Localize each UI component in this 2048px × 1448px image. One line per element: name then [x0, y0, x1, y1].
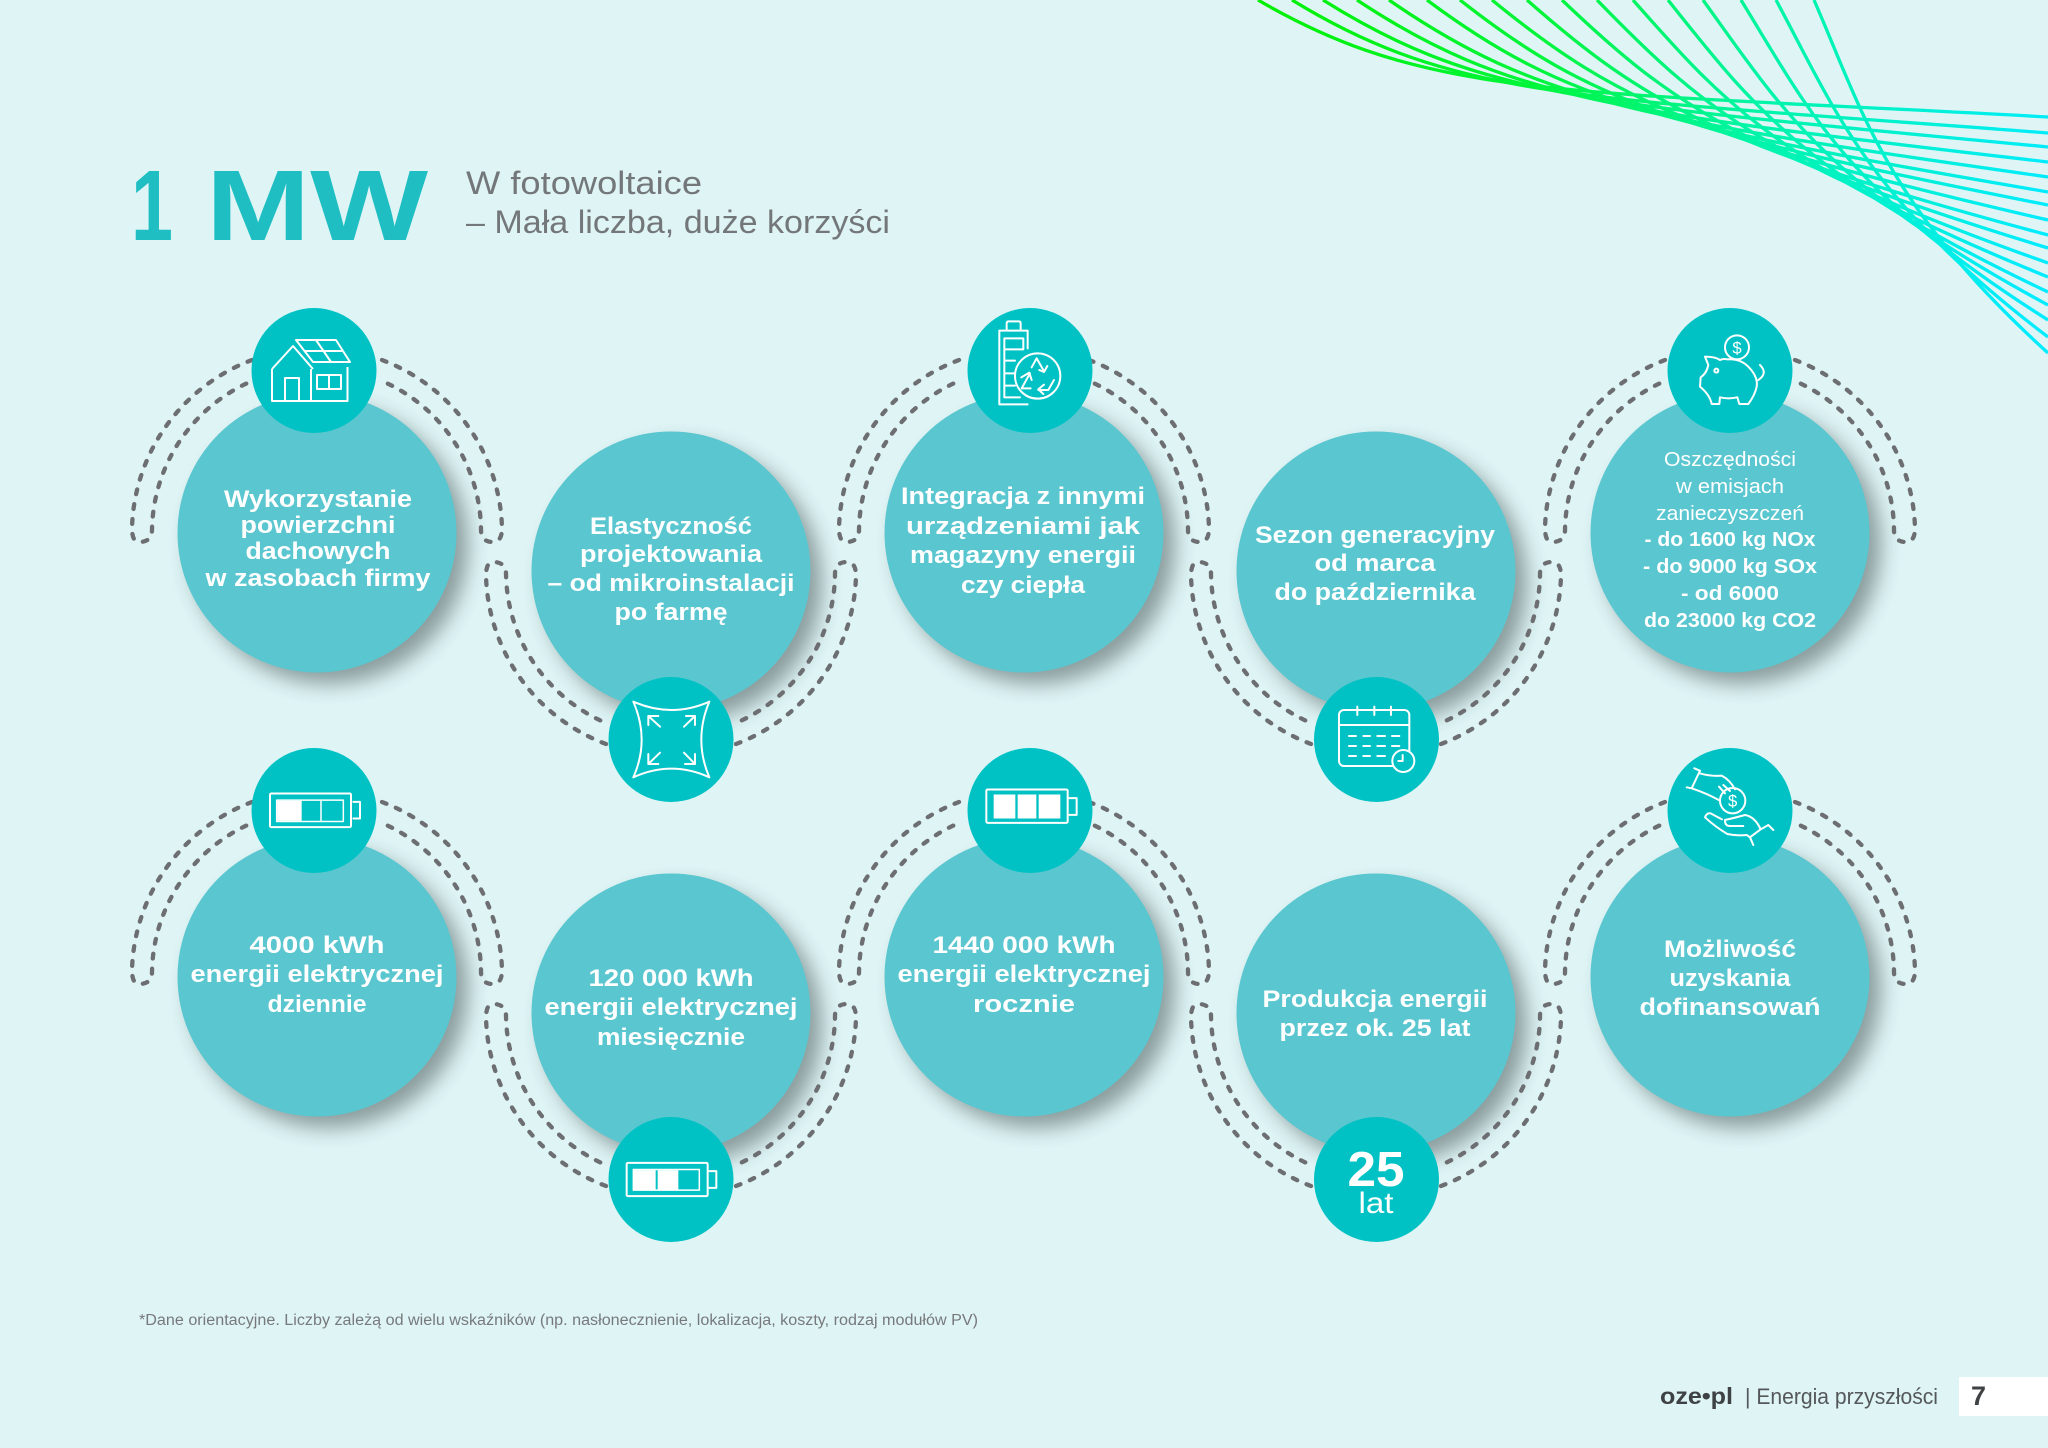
- panel: 4000 kWh: [132, 748, 502, 1128]
- icon: battery one third: [270, 794, 360, 827]
- panel: 1440 000 kWh: 1440 000 kWh: [932, 932, 1116, 959]
- page number: 7: [1971, 1381, 1986, 1411]
- panel: 25 lat: Produkcja energii: [1262, 986, 1488, 1013]
- panel: 1440 000 kWh: rocznie: [973, 991, 1075, 1018]
- panel: sezon: Sezon generacyjny: [1255, 522, 1495, 549]
- panel: 120 000 kWh: miesięcznie: [597, 1024, 745, 1051]
- panel: integracja: Integracja z innymi: [901, 483, 1145, 510]
- footer brand: oze•pl: [1660, 1383, 1733, 1409]
- panel: dachy: Wykorzystanie: [224, 486, 412, 513]
- subtitle: W fotowoltaice: [466, 165, 702, 201]
- panel: 1440 000 kWh: [839, 748, 1209, 1128]
- panel: integracja: [839, 308, 1209, 684]
- panel: 120 000 kWh: energii elektrycznej: [544, 994, 798, 1021]
- panel: dachy: dachowych: [246, 538, 390, 565]
- panel: 25 lat: przez ok. 25 lat: [1280, 1015, 1470, 1042]
- icon: battery recycle: [999, 321, 1060, 404]
- panel: integracja: urządzeniami jak: [906, 513, 1140, 540]
- panel: 25 lat: [1191, 874, 1561, 1242]
- panel: sezon: [1191, 432, 1561, 802]
- panel: dofinansowanie: uzyskania: [1670, 965, 1791, 992]
- icon: solar house: [272, 340, 350, 401]
- icon: piggy bank: [1700, 335, 1764, 404]
- subtitle: [466, 165, 890, 240]
- panel: dofinansowanie: [1545, 748, 1915, 1128]
- footnote: *Dane orientacyjne. Liczby zależą od wielu wskaźników (np. nasłonecznienie, lokalizacja, koszty, rodzaj modułów PV): [139, 1312, 978, 1329]
- panel: 4000 kWh: energii elektrycznej: [190, 961, 444, 988]
- panel: dofinansowanie: Możliwość: [1664, 936, 1796, 963]
- panel: oszczędności: - do 9000 kg SOx: [1643, 556, 1817, 578]
- panel: elastyczność: [486, 432, 856, 802]
- footer brand: | Energia przyszłości: [1745, 1384, 1938, 1409]
- icon: piggy bank: $: [1732, 338, 1742, 357]
- panel: sezon: do października: [1274, 579, 1476, 606]
- panel: dofinansowanie: dofinansowań: [1640, 994, 1820, 1021]
- panel: oszczędności: - do 1600 kg NOx: [1644, 529, 1816, 551]
- panel: 1440 000 kWh: energii elektrycznej: [898, 961, 1150, 988]
- panel: 120 000 kWh: 120 000 kWh: [588, 965, 754, 992]
- icon: expand: [633, 702, 709, 777]
- panel: sezon: od marca: [1314, 550, 1436, 577]
- footer brand: [1660, 1383, 1938, 1409]
- icon: 25 years: [1348, 1143, 1404, 1220]
- panel: elastyczność: po farmę: [614, 599, 728, 626]
- panel: 4000 kWh: 4000 kWh: [250, 932, 384, 959]
- panel: oszczędności: Oszczędności: [1664, 449, 1796, 471]
- panel: oszczędności: - od 6000: [1681, 583, 1779, 605]
- icon: 25 years: 25: [1348, 1143, 1404, 1197]
- panel: dachy: [132, 308, 502, 684]
- icon: battery two thirds: [627, 1163, 716, 1196]
- title: MW: [206, 150, 429, 262]
- icon: calendar: [1339, 707, 1414, 772]
- panel: integracja: magazyny energii: [910, 542, 1136, 569]
- panel: elastyczność: projektowania: [580, 541, 762, 568]
- title: [131, 150, 429, 262]
- decorative wave lines: [1258, 0, 2048, 353]
- panel: oszczędności: do 23000 kg CO2: [1644, 610, 1816, 632]
- panel: dachy: w zasobach firmy: [204, 565, 431, 592]
- panel: 120 000 kWh: [486, 874, 856, 1242]
- panel: 4000 kWh: dziennie: [268, 991, 366, 1018]
- panel: oszczędności: zanieczyszczeń: [1656, 503, 1804, 525]
- panel: dachy: powierzchni: [240, 512, 396, 539]
- panel: elastyczność: – od mikroinstalacji: [548, 570, 794, 597]
- panel: elastyczność: Elastyczność: [590, 513, 752, 540]
- icon: 25 years: lat: [1358, 1187, 1394, 1220]
- panel: oszczędności: w emisjach: [1675, 476, 1784, 498]
- subtitle: – Mała liczba, duże korzyści: [466, 204, 890, 240]
- panel: integracja: czy ciepła: [961, 572, 1085, 599]
- icon: battery full: [986, 790, 1077, 823]
- icon: hands with coin: $: [1728, 792, 1737, 811]
- title: 1: [131, 150, 173, 262]
- page number: [1959, 1377, 2048, 1416]
- panel: oszczędności: [1545, 308, 1915, 684]
- icon: hands with coin: [1687, 768, 1773, 845]
